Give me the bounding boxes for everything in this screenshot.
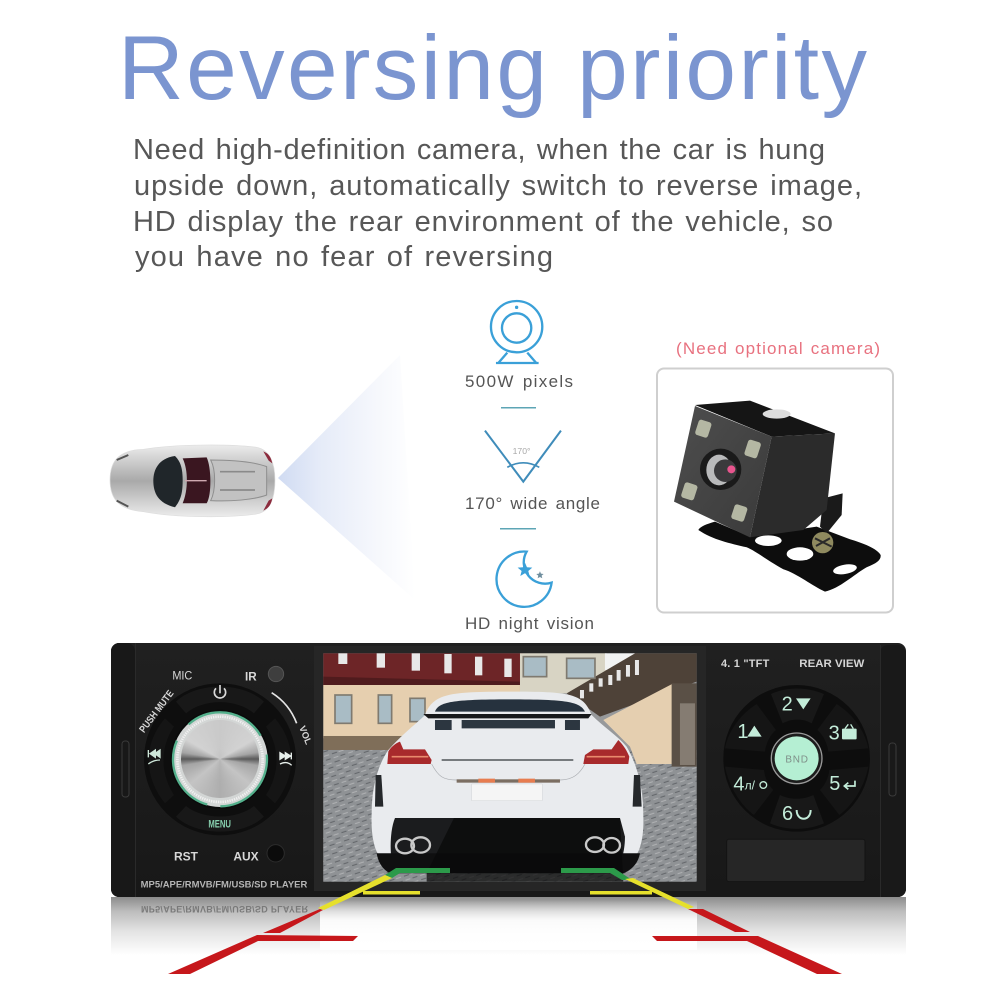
- right button wheel: BND: [785, 754, 808, 765]
- button labels: л/: [745, 779, 756, 793]
- description text: upside down, automatically switch to reverse image,: [134, 170, 862, 202]
- screen bezel: [314, 646, 706, 891]
- panel labels: VOL: [297, 724, 314, 746]
- power icon: [214, 685, 226, 698]
- title: Reversing priority: [118, 18, 868, 119]
- label: HD night vision: HD night vision: [465, 614, 594, 633]
- button labels: [733, 694, 857, 825]
- panel: optional camera: [657, 368, 893, 612]
- red guides: [168, 909, 842, 974]
- panel labels: IR: [245, 671, 257, 684]
- car rear: [372, 692, 643, 858]
- camera view beam: [278, 355, 415, 600]
- callout: need optional camera: (Need optional camera): [676, 339, 880, 358]
- card slot cover: [727, 839, 865, 882]
- divider 1: [501, 407, 536, 408]
- menu label: MENU: [208, 818, 231, 830]
- right button wheel: [721, 658, 870, 882]
- button labels: 3: [829, 723, 840, 745]
- AUX jack: [267, 845, 284, 862]
- icon: wide angle: [485, 431, 561, 482]
- volume arc: [272, 693, 297, 723]
- panel labels: MP5/APE/RMVB/FM/USB/SD PLAYER: [141, 879, 308, 889]
- reflection of head unit: [111, 897, 906, 955]
- description text: Need high-definition camera, when the car is hung: [133, 134, 825, 166]
- button labels: 5: [829, 773, 840, 795]
- yellow guides: [318, 875, 694, 910]
- icon: rear camera: [674, 401, 881, 592]
- panel labels: [138, 669, 314, 889]
- green guides: [385, 868, 632, 880]
- button labels: 1: [737, 721, 748, 743]
- description text: [133, 134, 862, 273]
- description text: you have no fear of reversing: [135, 241, 553, 273]
- panel labels: MIC: [172, 669, 192, 682]
- panel headings: REAR VIEW: [799, 658, 865, 670]
- icon: moon and stars: [497, 552, 552, 607]
- button labels: 2: [782, 694, 793, 716]
- divider 2: [500, 528, 536, 530]
- icon: wide angle: 170°: [513, 446, 531, 456]
- description text: HD display the rear environment of the vehicle, so: [133, 206, 833, 238]
- previous icon: [148, 750, 160, 757]
- panel headings: [721, 658, 865, 670]
- panel headings: 4. 1 "TFT: [721, 658, 770, 670]
- label: 500W pixels: 500W pixels: [465, 372, 573, 391]
- next icon: [280, 753, 291, 759]
- parking guide lines: [168, 868, 842, 974]
- left control wheel: [138, 666, 314, 889]
- label: 170 wide angle: 170° wide angle: [465, 494, 600, 513]
- icon: webcam: [491, 301, 542, 363]
- screen: reversing image: [323, 653, 697, 882]
- BND button: [771, 733, 822, 784]
- head unit: [111, 643, 906, 897]
- silver knob: [181, 720, 259, 798]
- IR sensor: [268, 666, 284, 682]
- button labels: 4: [733, 773, 744, 795]
- mirrored label text: MP5/APE/RMVB/FM/USB/SD PLAYER: [141, 904, 308, 914]
- panel labels: RST: [174, 850, 199, 864]
- button labels: 6: [782, 803, 793, 825]
- panel labels: AUX: [233, 850, 259, 864]
- icon: top-view car: [110, 445, 275, 517]
- panel labels: PUSH MUTE: [138, 688, 177, 735]
